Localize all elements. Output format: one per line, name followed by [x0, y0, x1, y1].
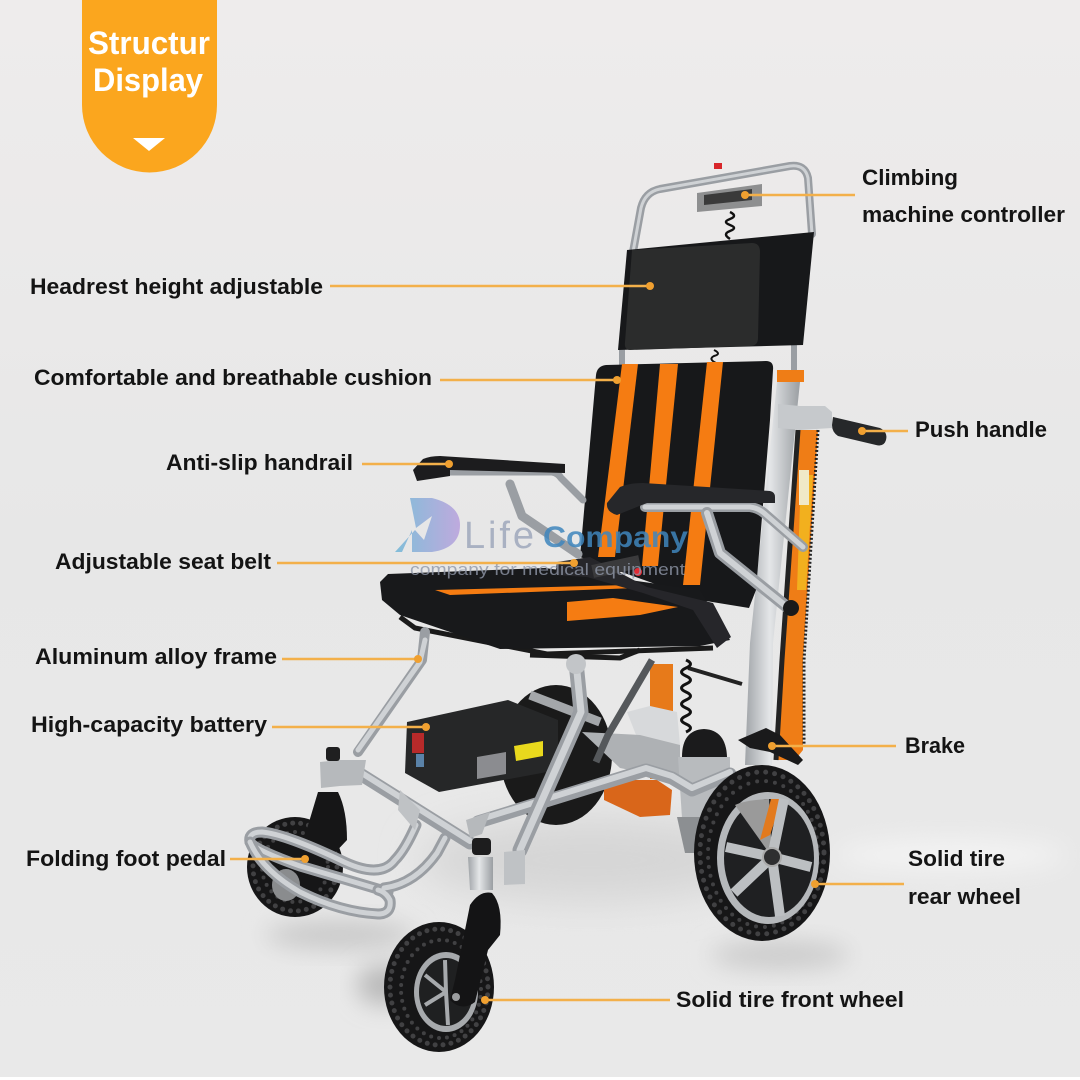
label: Solid tire rear wheel: rear wheel — [908, 884, 1021, 909]
aluminum alloy frame — [320, 632, 730, 843]
push handle — [832, 417, 886, 445]
brake — [738, 728, 803, 765]
seat cushion — [380, 568, 730, 649]
label: Anti-slip handrail — [166, 450, 453, 475]
rear wheel — [694, 765, 830, 941]
push frame — [622, 163, 812, 370]
label: High-capacity battery — [31, 712, 430, 737]
headrest — [618, 232, 814, 363]
orange track — [776, 430, 818, 760]
label: Adjustable seat belt: Adjustable seat belt — [55, 549, 272, 574]
right armrest — [607, 483, 803, 616]
label: Push handle — [858, 417, 1047, 442]
label: Aluminum alloy frame — [35, 644, 422, 669]
label: Climbing machine controller — [741, 165, 1065, 227]
label: Comfortable and breathable cushion: Comfortable and breathable cushion — [34, 365, 432, 390]
front post — [468, 654, 586, 890]
climbing machine controller — [697, 184, 762, 239]
badge: Structur Display — [82, 0, 217, 172]
label: Aluminum alloy frame: Aluminum alloy frame — [35, 644, 277, 669]
label: Solid tire rear wheel — [811, 846, 1021, 909]
back cushion — [580, 361, 773, 608]
left armrest — [413, 456, 583, 554]
seat belt — [555, 555, 731, 648]
watermark: company for medical equipment — [410, 560, 685, 579]
watermark: Company — [543, 521, 688, 554]
label: Solid tire rear wheel: Solid tire — [908, 846, 1005, 871]
badge: Structur Display: Display — [93, 62, 203, 98]
motor — [677, 729, 730, 853]
label: Anti-slip handrail: Anti-slip handrail — [166, 450, 353, 475]
label: Adjustable seat belt — [55, 549, 578, 574]
seat frame — [400, 617, 713, 658]
label: Solid tire front wheel: Solid tire front wheel — [676, 987, 904, 1012]
label: Folding foot pedal — [26, 846, 309, 871]
label: Headrest height adjustable: Headrest height adjustable — [30, 274, 323, 299]
front wheel — [384, 892, 501, 1052]
label: Push handle: Push handle — [915, 417, 1047, 442]
label: Climbing machine controller: Climbing — [862, 165, 958, 190]
high-capacity battery — [405, 700, 558, 792]
badge: Structur Display: Structur — [88, 25, 210, 61]
label: Solid tire front wheel — [481, 987, 904, 1012]
label: High-capacity battery: High-capacity battery — [31, 712, 268, 737]
silver column — [745, 370, 832, 765]
label: Brake: Brake — [905, 733, 965, 758]
label: Brake — [768, 733, 965, 758]
wheelchair — [247, 163, 886, 1052]
caster wheel — [247, 792, 347, 917]
label: Climbing machine controller: machine controller — [862, 202, 1065, 227]
watermark: Life — [464, 515, 534, 557]
watermark — [395, 498, 688, 579]
label: Comfortable and breathable cushion — [34, 365, 621, 390]
rear big wheel and mid frame — [500, 660, 742, 825]
folding foot pedal — [250, 790, 445, 914]
label: Headrest height adjustable — [30, 274, 654, 299]
label: Folding foot pedal: Folding foot pedal — [26, 846, 226, 871]
